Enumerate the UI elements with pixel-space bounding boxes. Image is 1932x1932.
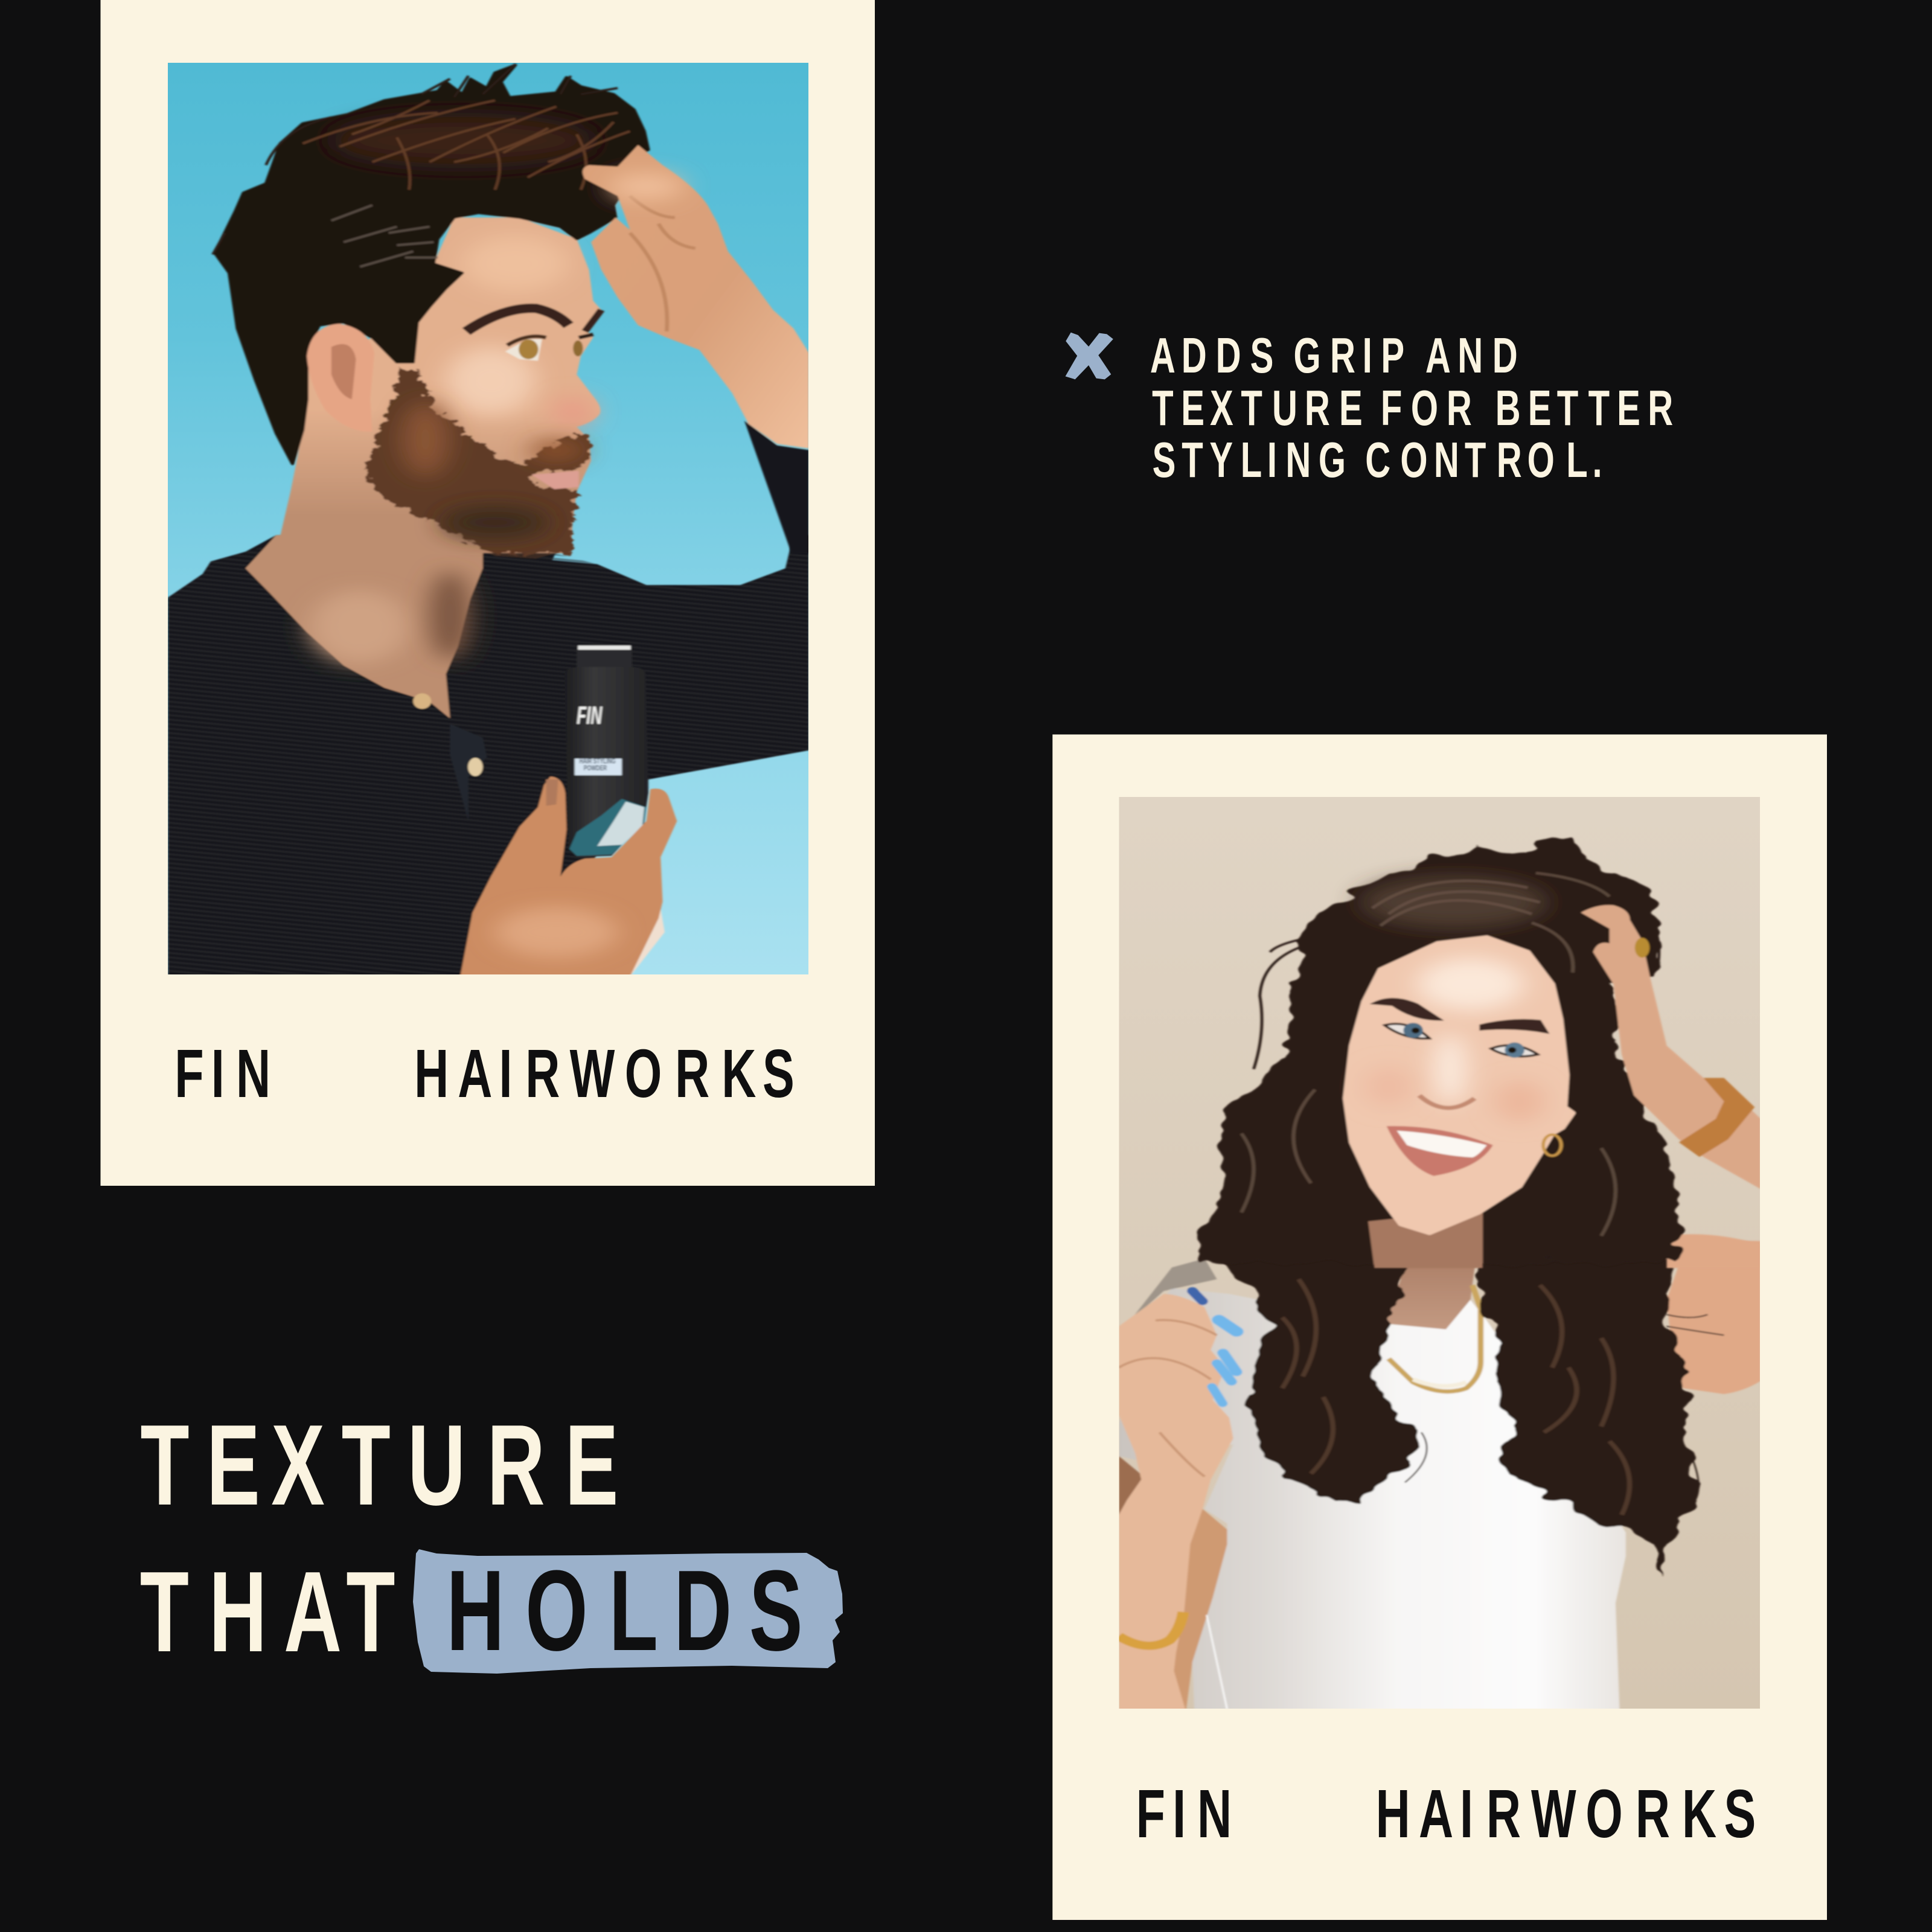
highlight patch	[413, 1549, 843, 1674]
hand in hair	[1581, 905, 1761, 1189]
earring	[1543, 1134, 1561, 1156]
beard	[364, 365, 591, 553]
hair locks	[1204, 1238, 1697, 1576]
holding hand	[630, 910, 665, 974]
brand label: FINHAIRWORKS	[174, 1035, 795, 1112]
white tee	[1119, 1288, 1626, 1712]
nose	[1419, 1095, 1474, 1108]
icon: x mark	[1066, 333, 1113, 379]
photo: man with styling powder	[168, 63, 809, 977]
forearm top edge	[1667, 1234, 1761, 1268]
gold ring	[1635, 938, 1649, 958]
hair mass	[1197, 841, 1679, 1262]
heading line: texture: TEXTURE	[140, 1401, 618, 1529]
text block	[1150, 328, 1673, 488]
sleeve	[744, 421, 809, 553]
eye and brow	[466, 309, 569, 331]
callout: adds grip and texture	[1066, 328, 1673, 488]
eyes	[1384, 1024, 1430, 1038]
face	[1346, 938, 1573, 1233]
panel: man photo card	[100, 0, 875, 1186]
ear	[307, 324, 374, 432]
heading line: that: THAT	[140, 1548, 395, 1676]
product bottle: HAIR STYLING	[579, 757, 616, 766]
gold watch	[1679, 1078, 1754, 1157]
gold bangle	[1119, 1612, 1183, 1646]
title: texture that holds	[140, 1401, 843, 1676]
panel: woman photo card	[1052, 734, 1827, 1920]
raised hand and forearm	[583, 145, 809, 449]
lower body: shirt, hair, arms	[1119, 1238, 1761, 1712]
product bottle: FIN	[577, 702, 603, 730]
raised hand with blue nails	[1119, 1294, 1233, 1712]
photo: woman with curly hair	[1119, 797, 1761, 1712]
text block: TEXTUREFORBETTER	[1152, 380, 1673, 437]
face and neck skin	[276, 217, 601, 553]
smile	[1387, 1126, 1493, 1176]
heading word: holds: HOLDS	[446, 1547, 803, 1675]
brows	[1374, 999, 1440, 1019]
hair	[215, 65, 648, 464]
head: hair, face, raised hand	[1197, 841, 1761, 1268]
product bottle: POWDER	[584, 764, 607, 772]
brand label: FINHAIRWORKS	[1136, 1776, 1756, 1852]
text block: STYLINGCONTROL.	[1153, 432, 1602, 488]
text block: ADDSGRIPAND	[1150, 328, 1518, 384]
head: hair, face, raised hand	[213, 64, 809, 553]
necklace	[1389, 1285, 1480, 1392]
upper body: shirt, neck, bottle, hand	[168, 535, 809, 977]
product bottle	[565, 645, 648, 857]
